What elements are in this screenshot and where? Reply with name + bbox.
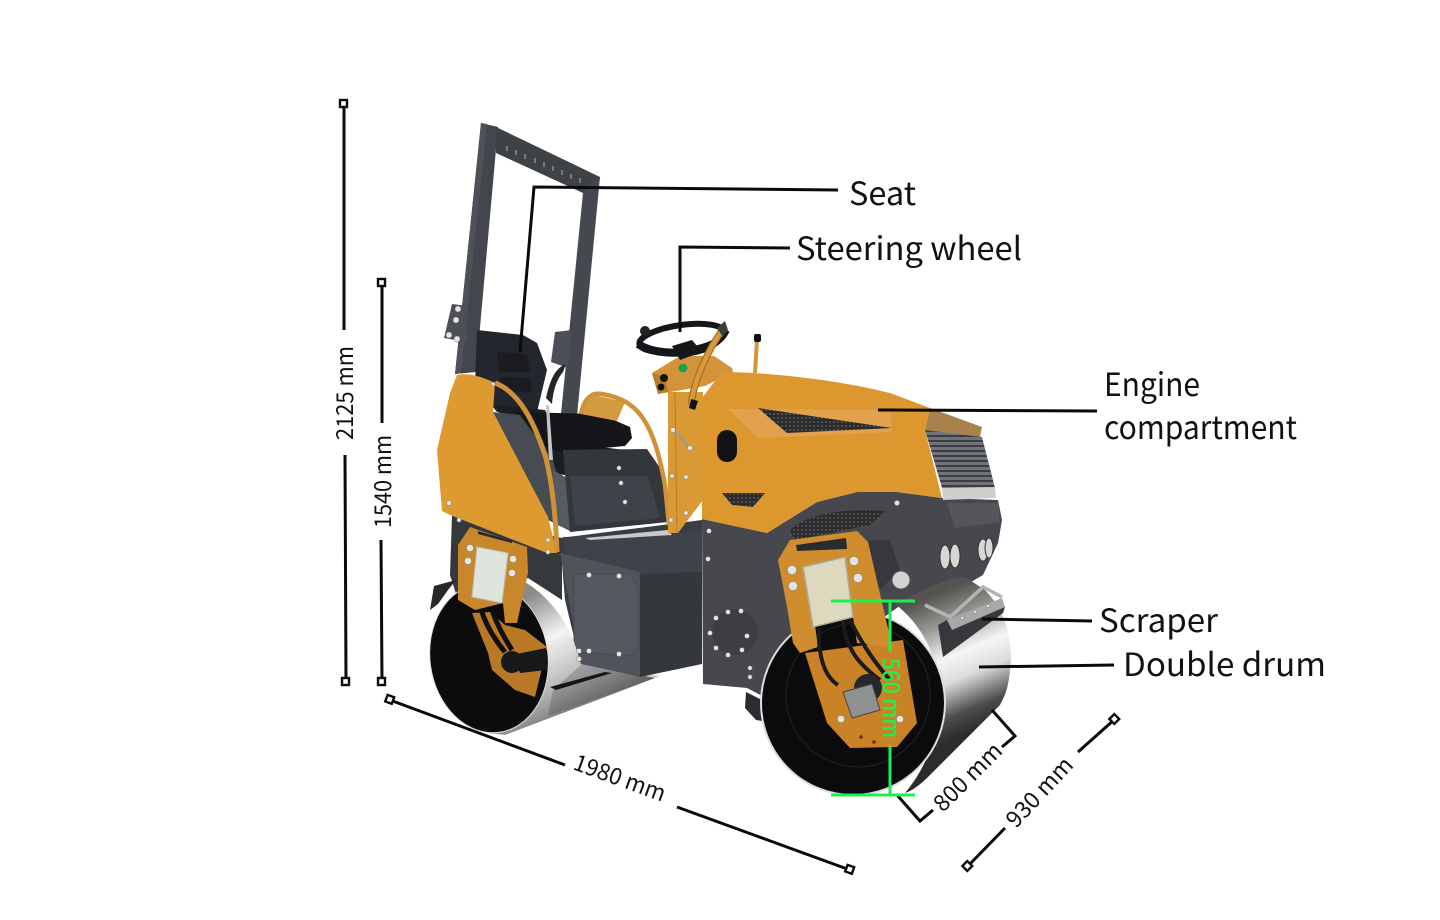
driver seat	[475, 330, 640, 475]
front chassis panel	[702, 492, 1002, 722]
callout: engine compartment: compartment	[1104, 403, 1297, 449]
scraper	[925, 587, 1005, 657]
callout: engine compartment	[878, 360, 1297, 449]
callout: seat	[520, 169, 916, 352]
rear right handrail and plate	[581, 394, 669, 525]
rear body behind bracket	[450, 515, 562, 600]
dimension: overall height 2125 mm	[326, 100, 360, 685]
steering wheel	[638, 319, 761, 410]
dimension: width 930 mm: 930 mm	[996, 748, 1080, 834]
dimension: length 1980 mm	[385, 695, 854, 874]
callout: seat: Seat	[849, 169, 916, 215]
rear wheel bracket and motor	[457, 518, 547, 697]
front steel drum	[761, 577, 1011, 795]
callout: steering wheel	[680, 224, 1022, 332]
callout: double drum: Double drum	[1123, 640, 1326, 686]
dimension: drum diameter 560 mm	[831, 601, 915, 795]
seat pedestal	[493, 364, 668, 532]
callout: engine compartment: Engine	[1104, 360, 1200, 406]
central chassis and steps	[550, 520, 702, 690]
rear orange fender	[437, 374, 557, 554]
callout: scraper: Scraper	[1099, 596, 1219, 642]
callout: steering wheel: Steering wheel	[796, 224, 1022, 270]
rear drum	[420, 576, 660, 740]
gauges on front panel	[940, 538, 993, 569]
front wheel bracket and hydraulic motor	[778, 531, 917, 748]
rollover protection frame	[444, 123, 600, 416]
dimension: height 1540 mm	[364, 279, 398, 685]
dimension: overall height 2125 mm: 2125 mm	[326, 346, 360, 440]
dimension: height 1540 mm: 1540 mm	[364, 435, 398, 528]
dimension: width 930 mm	[962, 714, 1119, 871]
dimension: drum diameter 560 mm: 560 mm	[876, 658, 910, 738]
engine hood	[702, 372, 996, 533]
dimension: drum width 800 mm	[897, 710, 1015, 821]
roller machine illustration	[420, 123, 1011, 795]
steering column housing	[652, 356, 733, 533]
dimension: drum width 800 mm: 800 mm	[924, 733, 1009, 818]
dimension: length 1980 mm: 1980 mm	[570, 744, 671, 808]
